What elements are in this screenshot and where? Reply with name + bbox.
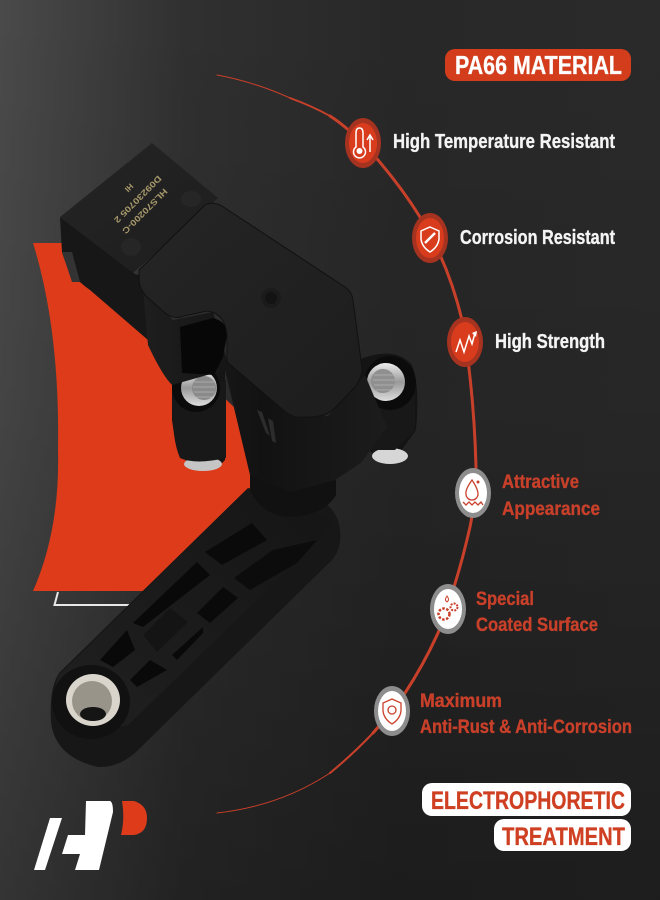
part number marking: HLS70200-C — [120, 187, 170, 236]
icon: shield — [412, 213, 448, 263]
white corner outline — [54, 592, 133, 605]
sensor product photo — [51, 143, 417, 767]
part number marking: HI — [123, 182, 135, 194]
feature: maximum anti-rust and anti-corrosion: Maximum — [420, 690, 502, 712]
icon: shield Q — [374, 686, 410, 736]
logo — [34, 801, 147, 870]
left mount post — [172, 364, 226, 471]
feature: high temperature resistant — [345, 118, 615, 168]
feature: high temperature resistant: High Temperature Resistant — [393, 130, 615, 153]
right mount post — [355, 354, 417, 464]
feature: attractive appearance: Attractive — [502, 471, 579, 493]
slot in body — [180, 318, 227, 375]
icon: gears — [430, 584, 466, 634]
neck — [250, 440, 336, 517]
moulded digits — [257, 410, 276, 443]
feature: high strength — [447, 317, 605, 367]
arm bushing — [52, 665, 130, 739]
feature: corrosion resistant — [412, 213, 615, 263]
feature: corrosion resistant: Corrosion Resistant — [460, 226, 615, 249]
vent dimple — [261, 288, 281, 308]
feature: attractive appearance — [455, 468, 600, 520]
connecting arc — [217, 75, 476, 813]
lower arm — [51, 488, 340, 767]
feature: attractive appearance: Appearance — [502, 498, 600, 520]
feature: maximum anti-rust and anti-corrosion — [374, 686, 632, 738]
red backdrop shape — [33, 243, 300, 591]
part number marking — [112, 174, 170, 236]
feature: special coated surface: Coated Surface — [476, 614, 598, 636]
icon: rising chart — [447, 317, 483, 367]
badge: electrophoretic treatment: TREATMENT — [502, 823, 625, 851]
feature: special coated surface — [430, 584, 598, 636]
connector housing — [60, 143, 218, 340]
body top face — [139, 203, 362, 417]
badge: electrophoretic treatment — [422, 783, 631, 851]
icon: water drop — [455, 468, 491, 518]
icon: thermometer — [345, 118, 381, 168]
part number marking: D09230705 2 — [112, 174, 164, 225]
feature: high strength: High Strength — [495, 330, 605, 353]
main body side — [143, 290, 387, 492]
feature: special coated surface: Special — [476, 588, 534, 610]
badge: PA66 material: PA66 MATERIAL — [455, 50, 622, 80]
